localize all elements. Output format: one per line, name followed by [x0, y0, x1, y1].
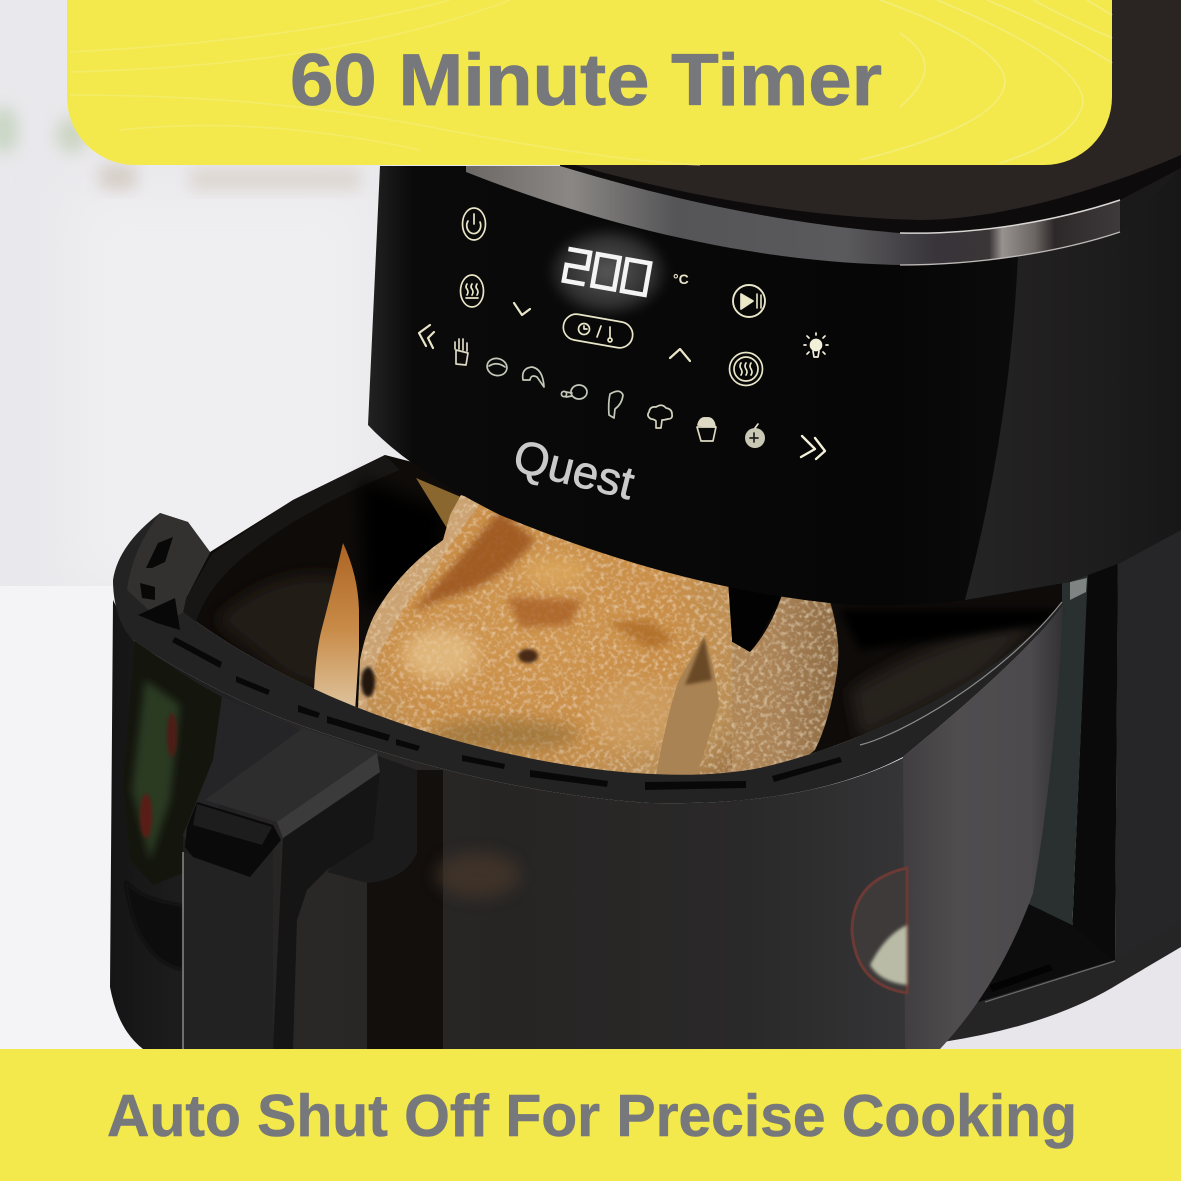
icon: up chevron [670, 349, 690, 361]
basket right face [903, 604, 1063, 1049]
icon: fruit [745, 424, 765, 448]
icon: drumstick [561, 385, 587, 399]
gap behind leg [725, 585, 785, 655]
fryer floor [960, 895, 1115, 1010]
front wing fold [655, 637, 719, 780]
browned ridge [412, 510, 535, 612]
icon: power [462, 208, 486, 240]
black channel [1072, 550, 1118, 962]
icon: broccoli [648, 405, 672, 428]
skin highlights [402, 629, 478, 681]
body side under lid [1120, 168, 1181, 300]
icon: light bulb [804, 333, 828, 357]
fryer base [943, 921, 1181, 1042]
handle side arm [273, 770, 380, 1049]
icon: steak [485, 356, 509, 378]
celsius unit: °C [673, 271, 689, 287]
chicken breast [366, 490, 732, 790]
left wing tip [314, 543, 359, 712]
left wing body [358, 495, 505, 715]
control panel icons [419, 208, 828, 459]
handle bevel [277, 753, 380, 838]
glass window [1020, 570, 1088, 932]
control panel housing [368, 166, 1181, 606]
handle top [205, 728, 377, 822]
icon: left double chevron [419, 325, 434, 348]
shaded lower breast [430, 719, 580, 751]
handle grip [183, 850, 273, 1049]
right body column [1115, 500, 1181, 962]
back leg [690, 595, 838, 790]
icon: play pause [733, 285, 765, 317]
handle collar [327, 755, 417, 883]
icon: heat [730, 352, 762, 386]
caption: Auto Shut Off For Precise Cooking [107, 1083, 1077, 1149]
vent slots [138, 537, 842, 790]
bottom caption band [0, 1049, 1181, 1181]
chicken neck [416, 478, 495, 590]
icon: right double chevron [801, 436, 825, 459]
basket handle [183, 728, 417, 1049]
basket back and interior [183, 455, 1062, 775]
air fryer rear body [560, 150, 1181, 1042]
roast chicken [314, 478, 838, 790]
icon: time and temperature selector [561, 312, 635, 350]
handle cap [185, 802, 281, 877]
icon: steam [460, 275, 484, 307]
Quest logo: Quest [509, 429, 640, 509]
icon: down chevron [514, 303, 530, 315]
icon: muffin [697, 418, 716, 441]
scorch marks [518, 649, 538, 663]
icon: fries [455, 339, 468, 365]
top title panel [67, 0, 1112, 165]
air fryer lid [575, 0, 1181, 220]
icon: chicken wing [523, 367, 544, 387]
basket rim with vents [113, 513, 1063, 803]
title: 60 Minute Timer [290, 40, 882, 121]
basket front [110, 600, 905, 1049]
stainless trim [466, 166, 1120, 265]
LED temperature display [546, 226, 689, 318]
basket front reflections [123, 640, 907, 1049]
browned patches [507, 597, 582, 628]
icon: fish [609, 391, 623, 418]
